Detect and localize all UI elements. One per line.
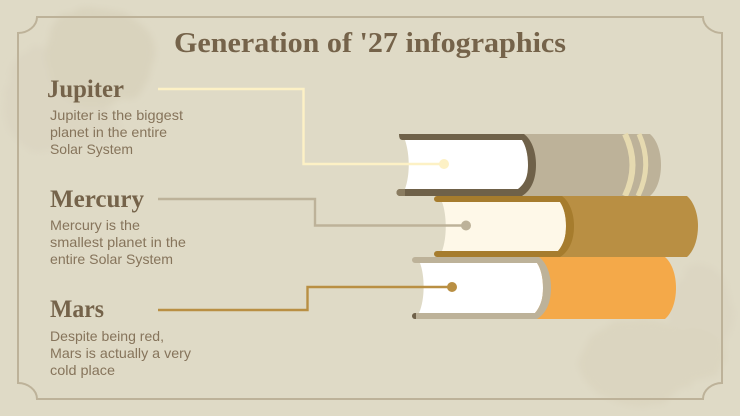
text block: Mercury: Mercury — [50, 186, 144, 213]
text block: Mars: Mars — [50, 296, 104, 323]
text block: Mercury: entire Solar System — [50, 251, 173, 267]
text block: Mars: cold place — [50, 362, 115, 378]
book: middle, ochre — [434, 196, 698, 257]
text block: Jupiter: planet in the entire — [50, 124, 167, 140]
text block: Jupiter: Jupiter is the biggest — [50, 107, 183, 123]
text block: Jupiter: Solar System — [50, 141, 133, 157]
watercolor stain: bottom right — [580, 264, 732, 406]
watercolor stain: top left — [4, 8, 156, 152]
text block: Jupiter — [47, 76, 183, 157]
text block: Mars: Despite being red, — [50, 328, 164, 344]
book: bottom, orange — [412, 257, 676, 319]
text block: Mercury — [50, 186, 186, 267]
text block: Mars: Mars is actually a very — [50, 345, 191, 361]
book stack illustration — [397, 134, 698, 319]
text block: Jupiter: Jupiter — [47, 76, 124, 103]
title: Generation of '27 infographics — [174, 27, 566, 59]
book: top, grey — [397, 134, 661, 196]
connector: Jupiter — [158, 89, 449, 169]
connector: Mars — [158, 282, 457, 310]
connector: Mercury — [158, 199, 471, 230]
text block: Mercury: Mercury is the — [50, 217, 140, 233]
text block: Mercury: smallest planet in the — [50, 234, 186, 250]
text block: Mars — [50, 296, 191, 378]
